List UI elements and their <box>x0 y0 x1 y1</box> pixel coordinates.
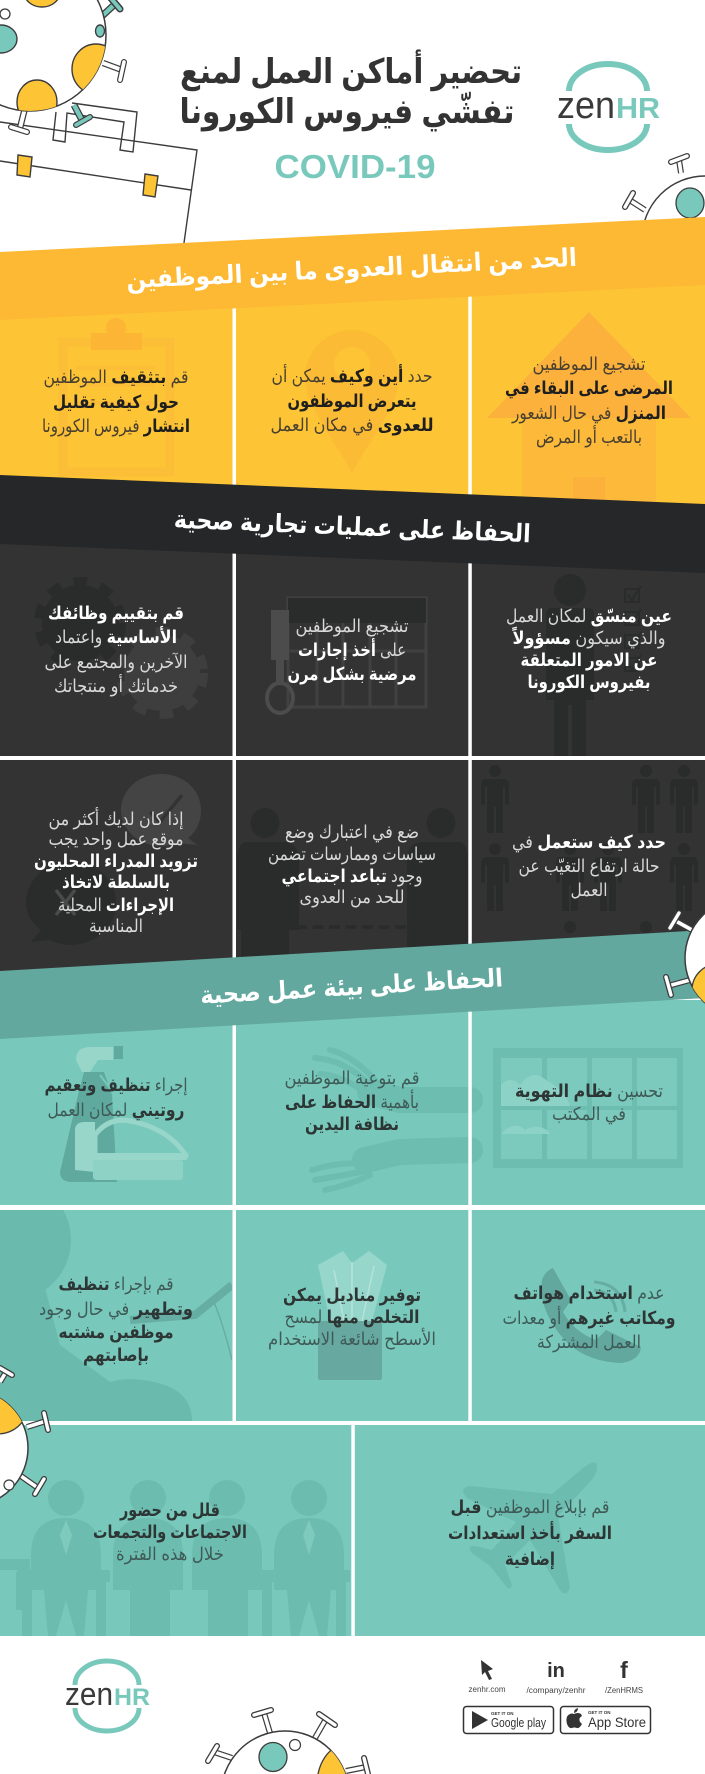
panel: routine cleaning <box>45 1046 188 1182</box>
text: routine cleaning <box>45 1075 188 1121</box>
title: تحضير أماكن العمل لمنع <box>180 49 522 92</box>
illustration: virus top left <box>0 0 124 132</box>
text: ventilation: في المكتب <box>552 1104 626 1125</box>
text: core functions: خدماتك أو منتجاتك <box>54 674 178 697</box>
text: hand hygiene: بأهمية الحفاظ على <box>285 1089 419 1112</box>
text: phones <box>502 1283 676 1353</box>
text: ventilation <box>515 1081 663 1125</box>
subtitle: COVID-19: COVID-19 <box>274 148 436 185</box>
button: App Store: GET IT ON <box>588 1710 610 1715</box>
illustration: virus left edge <box>0 1368 48 1506</box>
panel: flexible sick leave <box>267 598 426 713</box>
icon: group of people <box>481 765 698 933</box>
label: facebook: /ZenHRMS <box>605 1686 643 1695</box>
text: disinfect: وتطهير في حال وجود <box>39 1299 193 1320</box>
text: coordinator: بفيروس الكورونا <box>528 672 650 693</box>
text: coordinator <box>506 606 672 693</box>
text: where and how: للعدوى في مكان العمل <box>270 415 434 436</box>
text: wipes: الأسطح شائعة الاستخدام <box>268 1328 436 1350</box>
text: meetings: قلل من حضور <box>119 1500 220 1521</box>
text: wipes: التخلص منها لمسح <box>284 1307 420 1328</box>
label: website: zenhr.com <box>468 1685 506 1694</box>
panel: section 3 background rows <box>0 1000 705 1636</box>
label: linkedin: /company/zenhr <box>526 1686 586 1695</box>
icon: window <box>493 1048 683 1168</box>
text: wipes: توفير مناديل يمكن <box>283 1285 421 1306</box>
text: coordinator: عين منسّق لمكان العمل <box>506 606 672 627</box>
text: absenteeism: العمل <box>570 880 608 900</box>
logo: ZenHR footer: zen <box>65 1676 113 1712</box>
logo: ZenHR header: zen <box>557 85 615 127</box>
text: local managers: موقع عمل واحد يجب <box>48 829 184 850</box>
text: phones: العمل المشتركة <box>537 1332 641 1353</box>
icon: person with sprayer <box>0 1210 232 1421</box>
text: core functions: الأساسية واعتماد <box>55 626 177 648</box>
icon: airplane <box>463 1463 597 1594</box>
icon: two people with distance <box>237 808 468 975</box>
text: local managers: المناسبة <box>89 916 143 936</box>
button: Google Play: GET IT ON <box>491 1711 514 1716</box>
panel: assess core functions <box>40 583 202 713</box>
icon: speech bubbles <box>26 774 201 945</box>
text: where and how: حدد أين وكيف يمكن أن <box>272 364 432 387</box>
icon: spray bottle and brush <box>60 1046 188 1182</box>
button: Google Play <box>464 1706 554 1734</box>
text: distancing: ضع في اعتبارك وضع <box>285 822 419 843</box>
banner: section 2 heading: الحفاظ على عمليات تجارية صحية <box>173 506 531 548</box>
banner: section 3 heading: الحفاظ على بيئة عمل صحية <box>199 964 504 1010</box>
text: local managers <box>34 807 198 936</box>
text: wipes <box>268 1285 436 1350</box>
button: App Store: App Store <box>588 1714 646 1730</box>
panel: local managers <box>26 774 201 945</box>
text: educate: انتشار فيروس الكورونا <box>42 416 190 437</box>
title <box>180 49 522 132</box>
banner: section 1 heading <box>0 217 705 320</box>
icon: person with checklist <box>546 574 641 756</box>
text: distancing: سياسات وممارسات تضمن <box>268 844 436 865</box>
text: disinfect <box>39 1274 193 1366</box>
text: hand hygiene: نظافة اليدين <box>305 1114 399 1135</box>
illustration: briefcase <box>0 103 197 250</box>
text: disinfect: قم بإجراء تنظيف <box>58 1274 174 1295</box>
text: hand hygiene <box>284 1068 420 1135</box>
text: absenteeism <box>512 832 666 900</box>
text: hand hygiene: قم بتوعية الموظفين <box>284 1068 420 1089</box>
panel: social distancing <box>237 808 468 975</box>
text: travel: قم بإبلاغ الموظفين قبل <box>450 1497 610 1518</box>
panel: travel preparation <box>448 1463 612 1594</box>
icon: linkedin: in <box>547 1660 565 1682</box>
text: core functions: الآخرين والمجتمع على <box>44 651 188 673</box>
panel: appoint coordinator <box>506 574 672 756</box>
icon: hands <box>312 1050 470 1190</box>
panel: shared phones and desks <box>502 1268 676 1363</box>
text: travel: إضافية <box>505 1549 555 1569</box>
logo: ZenHR footer <box>65 1661 150 1731</box>
text: meetings: خلال هذه الفترة <box>116 1544 224 1565</box>
icon: facebook: f <box>620 1657 628 1683</box>
illustration: virus footer <box>208 1710 373 1774</box>
banner: section 3 heading <box>0 930 705 1039</box>
text: sick leave: تشجيع الموظفين <box>296 616 408 637</box>
logo: ZenHR footer: HR <box>114 1684 150 1711</box>
text: phones: عدم استخدام هواتف <box>514 1283 664 1304</box>
text: stay home: تشجيع الموظفين <box>532 354 646 375</box>
text: local managers: إذا كان لديك أكثر من <box>48 807 184 830</box>
icon: seated people <box>0 1480 350 1636</box>
text: phones: ومكاتب غيرهم أو معدات <box>502 1306 676 1329</box>
icon: calendar and thermometer <box>267 598 426 713</box>
icon: clipboard <box>63 318 170 472</box>
text: absenteeism: حدد كيف ستعمل في <box>512 832 666 853</box>
icon: tissue box <box>318 1251 387 1380</box>
title: تفشّي فيروس الكورونا <box>180 92 514 132</box>
banner: section 1 heading: الحد من انتقال العدوى ما بين الموظفين <box>126 244 578 295</box>
panel: ventilation <box>493 1048 683 1168</box>
logo: ZenHR header <box>557 64 660 150</box>
icon: map pin <box>305 330 399 473</box>
text: distancing <box>268 822 436 908</box>
text: where and how: يتعرض الموظفون <box>288 391 416 412</box>
text: disinfect: موظفين مشتبه <box>58 1322 174 1343</box>
button: App Store <box>560 1706 650 1734</box>
text: distancing: وجود تباعد اجتماعي <box>282 866 422 887</box>
text: core functions: قم بتقييم وظائفك <box>48 603 184 624</box>
text: core functions <box>44 603 188 697</box>
text: sick leave <box>288 616 416 685</box>
panel: disposable wipes <box>268 1251 436 1380</box>
text: routine cleaning: روتيني لمكان العمل <box>47 1100 184 1121</box>
illustration: virus top right <box>625 156 705 302</box>
panel: section 1 background <box>0 285 705 510</box>
text: stay home <box>505 354 673 448</box>
text: absenteeism: حالة ارتفاع التغيّب عن <box>518 856 660 877</box>
text: stay home: المنزل في حال الشعور <box>511 403 666 424</box>
text: meetings <box>93 1500 247 1565</box>
text: local managers: بالسلطة لاتخاذ <box>62 872 170 892</box>
panel: disinfect suspected cases <box>0 1210 232 1421</box>
logo: ZenHR header: HR <box>616 93 660 125</box>
text: educate: قم بتثقيف الموظفين <box>44 367 188 388</box>
button: Google Play: Google play <box>491 1715 546 1730</box>
text: local managers: تزويد المدراء المحليون <box>34 851 198 872</box>
panel: where and how exposed <box>270 330 434 473</box>
text: coordinator: عن الامور المتعلقة <box>520 650 658 671</box>
text: where and how <box>270 364 434 436</box>
icon: phone <box>541 1268 641 1363</box>
text: travel <box>448 1497 612 1569</box>
text: ventilation: تحسين نظام التهوية <box>515 1081 663 1102</box>
panel: section 2 background <box>0 535 705 756</box>
text: routine cleaning: إجراء تنظيف وتعقيم <box>45 1075 188 1096</box>
text: educate <box>42 367 190 437</box>
text: educate: حول كيفية تقليل <box>53 392 179 413</box>
text: distancing: للحد من العدوى <box>300 887 404 908</box>
illustration: virus right edge <box>663 910 705 1004</box>
text: sick leave: مرضية بشكل مرن <box>288 664 416 685</box>
panel: hand hygiene <box>284 1050 470 1190</box>
panel: absenteeism plan <box>481 765 698 933</box>
text: stay home: المرضى على البقاء في <box>505 378 673 399</box>
text: local managers: الإجراءات المحلية <box>58 895 174 916</box>
panel: stay home if sick <box>487 312 691 510</box>
text: sick leave: على أخذ إجازات <box>298 638 406 660</box>
panel: educate employees <box>42 318 190 472</box>
panel: reduce meetings <box>0 1480 350 1636</box>
text: coordinator: والذي سيكون مسؤولاً <box>511 626 666 649</box>
text: meetings: الاجتماعات والتجمعات <box>93 1522 247 1543</box>
icon: gears <box>40 583 202 713</box>
icon: website cursor <box>481 1660 493 1680</box>
text: travel: السفر بأخذ استعدادات <box>448 1521 612 1544</box>
banner: section 2 heading <box>0 475 705 573</box>
text: stay home: بالتعب أو المرض <box>536 425 642 448</box>
text: disinfect: بإصابتهم <box>83 1345 149 1366</box>
icon: house <box>487 312 691 510</box>
